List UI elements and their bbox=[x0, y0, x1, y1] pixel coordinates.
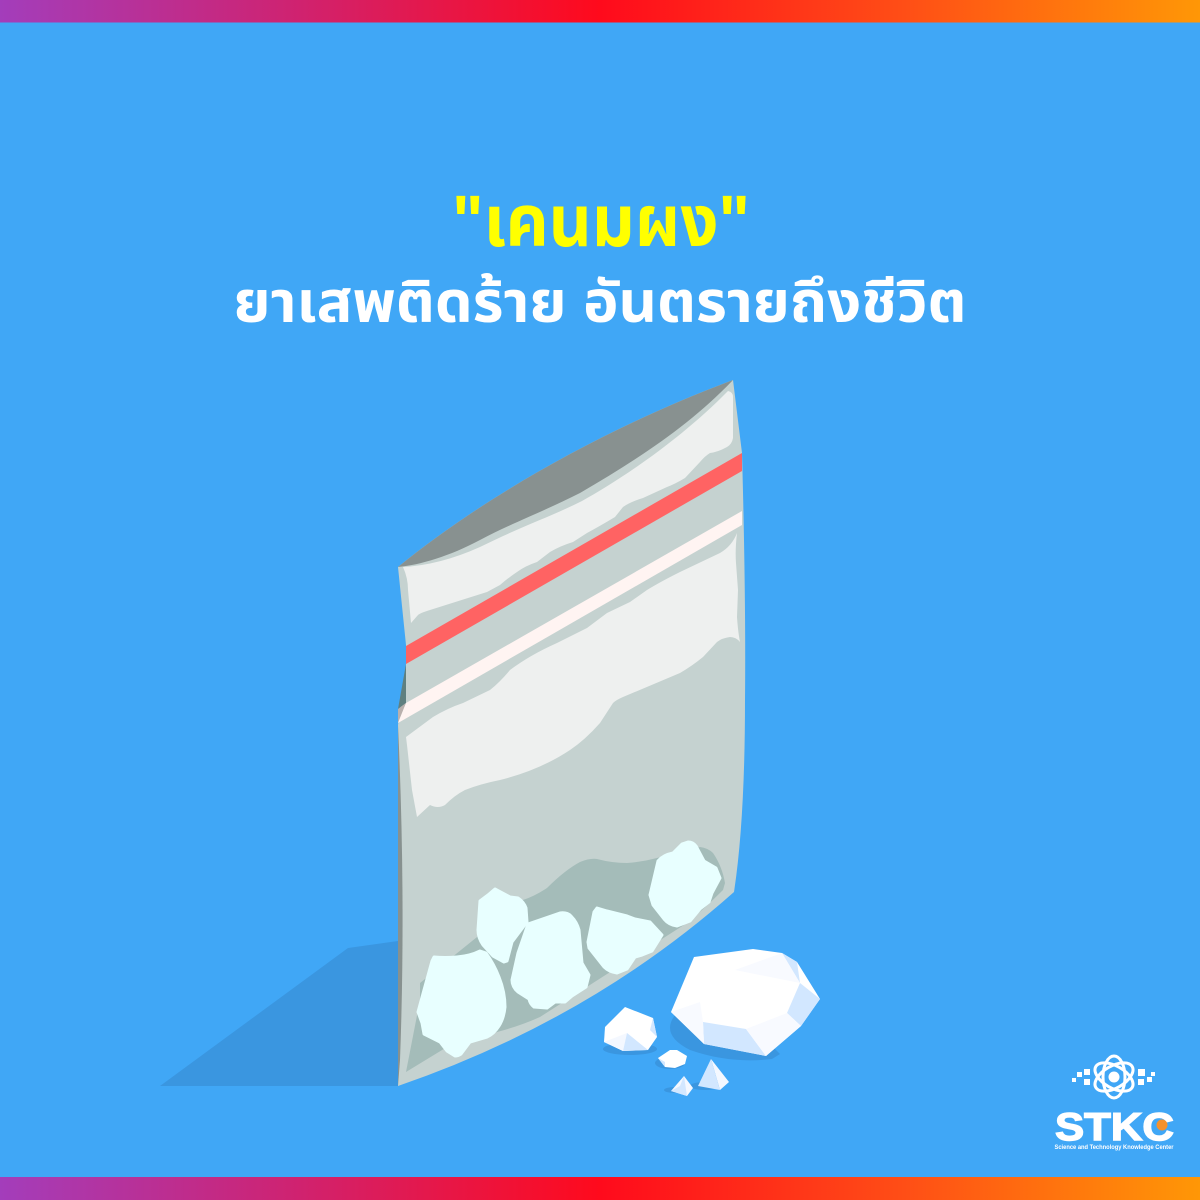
big crystal facet: right bbox=[787, 983, 820, 1026]
bag opening bbox=[398, 380, 733, 567]
logo pixels right bbox=[1138, 1069, 1155, 1085]
small pyramid crystal bbox=[671, 1076, 693, 1096]
zip bag bbox=[398, 380, 745, 1086]
big crystal facet: top right bbox=[782, 953, 800, 983]
big crystal facet: pale lower right bbox=[746, 1013, 801, 1056]
logo icon: atom bbox=[1090, 1056, 1138, 1098]
top gradient bar bbox=[0, 0, 1200, 22]
big crystal facet: bottom bbox=[703, 1022, 766, 1056]
big crystal facet: pale top bbox=[735, 953, 800, 983]
pyramid shadow bbox=[690, 1082, 720, 1090]
small crystal bbox=[604, 1007, 657, 1051]
logo wordmark: STKC bbox=[1055, 1106, 1174, 1149]
small pyramid blue face bbox=[671, 1076, 687, 1096]
bag body bbox=[398, 380, 745, 1086]
tiny crystal facet bbox=[658, 1058, 665, 1067]
logo orange dot bbox=[1156, 1120, 1168, 1130]
dark side notch bbox=[398, 664, 406, 709]
upper highlight bbox=[403, 391, 733, 623]
rock 3 bbox=[512, 913, 589, 1008]
pink notch bbox=[398, 703, 406, 723]
big crystal shadow bbox=[670, 1015, 780, 1060]
lower highlight bbox=[406, 533, 740, 817]
logo pixels left bbox=[1072, 1069, 1090, 1085]
STKC logo bbox=[1054, 1056, 1174, 1151]
small crystal facet: right bbox=[650, 1018, 657, 1037]
rock 5 bbox=[650, 842, 720, 926]
logo tagline: Science and Technology Knowledge Center bbox=[1054, 1145, 1174, 1151]
rock 1 bbox=[418, 951, 505, 1056]
small pyramid shadow bbox=[664, 1087, 686, 1093]
bottom gradient bar bbox=[0, 1177, 1200, 1200]
big crystal facet: pale left bbox=[671, 1002, 704, 1044]
tiny crystal bbox=[658, 1050, 687, 1068]
pyramid crystal bbox=[711, 1059, 729, 1090]
bag inner shaded bottom bbox=[406, 847, 725, 1072]
small crystal facet: blue bbox=[623, 1033, 648, 1051]
small crystal shadow bbox=[603, 1043, 657, 1055]
tiny crystal shadow bbox=[655, 1057, 685, 1069]
rock 2 bbox=[478, 889, 527, 962]
big crystal bbox=[671, 949, 820, 1056]
white zip stripe bbox=[398, 511, 742, 723]
crystals on the floor bbox=[603, 949, 820, 1096]
title: yellow heading: "เคนมผง" bbox=[452, 182, 750, 262]
rock 4 bbox=[588, 908, 662, 973]
small crystal facet: pale side bbox=[604, 1033, 627, 1051]
bag cast shadow bbox=[160, 941, 398, 1086]
pyramid crystal blue face bbox=[698, 1059, 720, 1090]
red zip stripe bbox=[406, 453, 742, 664]
bag left edge fold bbox=[398, 725, 403, 1086]
subtitle: white heading: ยาเสพติดร้าย อันตรายถึงชีวิต bbox=[234, 270, 966, 335]
